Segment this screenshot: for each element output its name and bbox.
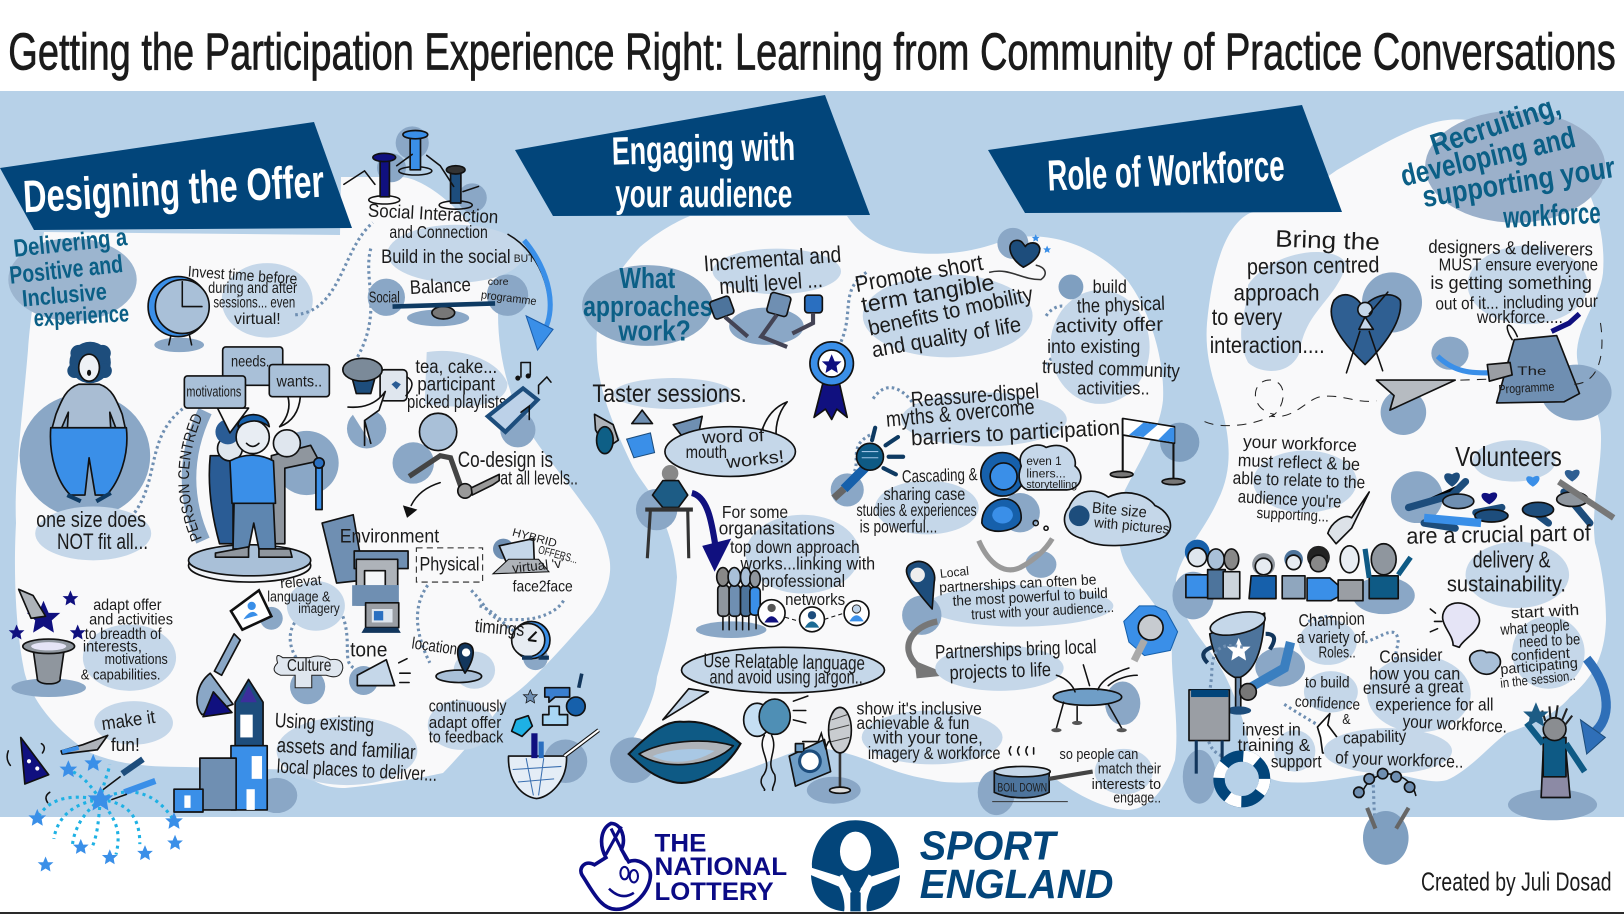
text: for some organisations: works...linking with — [740, 554, 875, 574]
text: are a crucial part: delivery & — [1473, 547, 1550, 573]
arrow: blue curve — [507, 234, 553, 350]
speech bubble: relatable language: and avoid using jargon.. — [709, 667, 863, 689]
icon: balance: programme — [480, 289, 537, 308]
speech bubbles: needs, motivations, wants: motivations — [186, 385, 241, 401]
icon: bowl and feedback puzzle — [508, 673, 599, 799]
text: cascading: is powerful... — [860, 516, 937, 536]
subheading: delivering a positive and inclusive experience — [8, 224, 137, 332]
logo: sport england: ENGLAND — [920, 861, 1113, 907]
icon: word of mouth bubble: works! — [724, 446, 785, 472]
logo: sport england — [811, 820, 1113, 911]
text: consider how — [1363, 645, 1508, 737]
icon: paper plane — [1376, 380, 1455, 435]
speech bubbles: needs, motivations, wants: wants.. — [276, 373, 322, 390]
icon: trophy with hand — [1203, 608, 1305, 715]
text: incremental and multi level — [703, 241, 842, 299]
text: bring the person centred: approach — [1234, 279, 1319, 305]
text: co-design — [458, 447, 578, 490]
text: volunteers: Volunteers — [1455, 441, 1562, 472]
icon: word of mouth bubble: word of — [701, 425, 765, 447]
text: cascading — [857, 464, 979, 536]
heading: engaging with your audience: your audience — [615, 172, 792, 216]
text: hybrid offers: OFFERS... — [537, 544, 579, 566]
text: capability of workforce — [1324, 726, 1464, 774]
icon: handshake — [979, 539, 1056, 578]
heading banner: designing the offer — [0, 122, 352, 230]
text: reassure dispel: myths & overcome — [885, 394, 1036, 432]
text: champion roles — [1297, 608, 1365, 665]
text: so people can match: match their — [1098, 762, 1161, 778]
icon: cupcake, mug and hand — [343, 358, 412, 448]
text: designers and deliverers: workforce.... — [1476, 307, 1563, 327]
text: local partnerships: trust with your audience... — [971, 600, 1114, 623]
text: start with what people: confident — [1510, 646, 1570, 665]
icon: phone and music notes — [488, 362, 551, 447]
text: promote short term: term tangible — [859, 269, 996, 318]
text: cascading: studies & experiences — [857, 500, 977, 520]
text: continuously adapt — [428, 697, 507, 750]
text: continuously adapt: to feedback — [429, 728, 504, 747]
text: hybrid offers: face2face — [513, 578, 573, 595]
text: build the physical: into existing — [1047, 336, 1140, 358]
icon: diverse group of people — [1172, 540, 1415, 619]
heading: engaging with your audience: Engaging with — [611, 125, 796, 174]
text: tea cake playlists: tea, cake... — [415, 356, 497, 378]
text: promote short term: and quality of life — [870, 311, 1023, 362]
text: make it fun: make it — [100, 706, 157, 734]
text: adapt offer: and activities — [89, 612, 173, 629]
text: adapt offer: adapt offer — [93, 597, 162, 614]
subheading: delivering a positive and inclusive experience: Positive and — [8, 251, 124, 290]
text: relevant language and imagery: relevat — [280, 573, 322, 592]
text: tea cake playlists: participant — [417, 373, 496, 395]
subheading: recruiting, developing and supporting your workforce — [1398, 89, 1618, 235]
icon: pointing white hand — [1317, 714, 1337, 753]
icon: fist badge — [1124, 606, 1178, 661]
logo: the national lottery: THE — [655, 830, 706, 857]
icon: lightbulb and hand — [393, 413, 461, 487]
icon: boil down pot — [978, 747, 1093, 815]
icon: buildings — [322, 515, 408, 606]
subheading: what approaches work: work? — [617, 316, 691, 348]
text: consider how: your workforce. — [1402, 711, 1508, 737]
text: invest in training — [1238, 719, 1322, 772]
text: so people can match: so people can — [1060, 747, 1138, 763]
text: for some organisations: professional — [761, 571, 845, 591]
text: partnerships bring local: Partnerships bring local — [935, 636, 1097, 664]
icon: the programme bag: The — [1517, 364, 1546, 378]
cloud: even one liners: even 1 — [1026, 454, 1062, 468]
text: social interaction and connection: Social Interaction — [367, 199, 499, 227]
subheading: what approaches work: What — [619, 263, 676, 295]
text: build the physical — [1042, 274, 1180, 404]
dashed flight path — [1205, 321, 1602, 426]
panel: right white area — [1176, 119, 1606, 783]
text: relevant language and imagery — [267, 573, 345, 631]
text: hybrid offers: virtual 'v' — [511, 555, 564, 576]
text: your workforce must reflect: must reflect & be — [1238, 450, 1360, 474]
text: for some organisations: For some — [722, 502, 788, 522]
text: designers and deliverers: MUST ensure everyone — [1439, 254, 1598, 274]
text: co-design: at all levels.. — [500, 468, 578, 490]
cloud: even one liners: liners... — [1026, 466, 1066, 480]
arrow: small down — [403, 483, 440, 518]
text: start with what people — [1499, 602, 1585, 691]
text: promote short term: benefits to mobility — [866, 281, 1035, 340]
subheading: recruiting, developing and supporting your workforce: Recruiting, — [1426, 89, 1565, 162]
subheading: delivering a positive and inclusive experience: Inclusive — [21, 278, 108, 313]
icon: location pin — [411, 634, 495, 689]
text: build the physical: trusted community — [1042, 356, 1180, 383]
text: designers and deliverers: out of it... including your — [1435, 291, 1598, 314]
icon: person on table — [636, 465, 693, 558]
text: promote short term: Promote short — [853, 249, 985, 297]
icon: flip chart — [1183, 690, 1229, 804]
text: using existing assets: Using existing — [274, 709, 375, 737]
icon: person reaching for star — [1508, 702, 1597, 820]
text: show its inclusive: show it's inclusive — [857, 699, 982, 719]
icon: skittle pins — [344, 126, 487, 212]
icon: word of mouth bubble: mouth — [686, 442, 727, 462]
icon: lips — [610, 722, 741, 783]
icon: heart with person — [1331, 272, 1422, 373]
text: environment and physical: Environment — [340, 526, 440, 548]
panel: left white area — [15, 177, 610, 788]
icon: magic hat and stars — [9, 589, 86, 697]
dotted connectors — [135, 223, 373, 513]
text: to build confidence: confidence — [1294, 693, 1360, 714]
text: tea cake playlists: picked playlists — [407, 391, 506, 412]
icon: video laptop — [352, 585, 401, 633]
text: partnerships bring local — [935, 636, 1097, 691]
dotted connectors — [841, 271, 1069, 471]
text: designers and deliverers: is getting something — [1430, 272, 1592, 293]
text: invest in training: invest in — [1242, 719, 1301, 739]
icon: megaphone: tone — [350, 639, 387, 662]
icon: woman with oversized trousers — [20, 342, 150, 518]
text: so people can match — [1060, 747, 1161, 807]
icon: megaphone — [349, 639, 410, 695]
text: build the physical: the physical — [1077, 293, 1165, 318]
text: cascading: Cascading & — [902, 464, 978, 487]
icon: heart in hand — [989, 228, 1051, 280]
icon: woman in headscarf — [981, 453, 1040, 532]
text: using existing assets: assets and familiar — [276, 734, 416, 764]
text: adapt offer: & capabilities. — [81, 667, 161, 683]
text: continuously adapt: adapt offer — [429, 713, 502, 732]
icon: culture puzzle cloud: Culture — [287, 655, 331, 675]
icon: lifebuoy — [1219, 756, 1265, 802]
text: invest time: during and after — [208, 280, 297, 297]
text: bring the person centred: person centred — [1247, 251, 1380, 279]
text: adapt offer — [81, 597, 176, 691]
text: are a crucial part — [1406, 520, 1592, 608]
text: invest time: Invest time before — [187, 264, 298, 288]
text: capability of workforce: of your workforce.. — [1335, 747, 1464, 772]
text: show its inclusive: with your tone, — [872, 728, 983, 748]
icon: volunteer hands and hearts — [1391, 470, 1614, 528]
text: consider how: experience for all — [1375, 694, 1493, 714]
text: consider how: how you can — [1369, 663, 1460, 683]
icon: balloons — [744, 696, 808, 790]
text: hybrid offers: HYBRID — [511, 527, 558, 550]
text: champion roles: Champion — [1298, 608, 1365, 631]
text: one size does not fit all: one size does — [36, 507, 146, 532]
icon: barrier — [1110, 418, 1199, 485]
text: champion roles: Roles.. — [1318, 645, 1356, 662]
heading banner: role of workforce — [988, 105, 1342, 213]
text: build the physical: activities.. — [1077, 378, 1150, 399]
background band — [0, 91, 1624, 817]
icon: balance: core — [488, 277, 509, 288]
text: cascading: sharing case — [883, 484, 965, 504]
text: capability of workforce: capability — [1343, 726, 1407, 748]
text: to build confidence: to build — [1305, 675, 1350, 692]
text: social interaction and connection — [367, 199, 534, 283]
text: consider how: ensure a great — [1363, 676, 1464, 698]
subheading: delivering a positive and inclusive experience: Delivering a — [12, 224, 129, 263]
text: for some organisations — [719, 502, 875, 609]
icon: picture frame — [231, 590, 283, 630]
icon: the programme bag: Programme — [1498, 380, 1555, 397]
text: social interaction and connection: BUT — [514, 253, 534, 265]
text: so people can match: engage.. — [1113, 791, 1161, 807]
text: continuously adapt: continuously — [429, 697, 507, 716]
icon: culture puzzle cloud — [274, 655, 343, 704]
subheading: what approaches work — [582, 263, 713, 348]
icon: lightbulb and cloud — [1430, 603, 1500, 674]
text: relevant language and imagery: language & — [267, 590, 331, 606]
panel: middle white area — [597, 216, 1176, 810]
icon: standing people — [696, 568, 766, 638]
logo: the national lottery: NATIONAL — [655, 854, 787, 881]
icon: microphone — [803, 707, 861, 804]
icon: person centred group — [178, 408, 339, 583]
text: bring the person centred: interaction.... — [1210, 332, 1325, 358]
text: reassure dispel: Reassure-dispel — [910, 378, 1040, 412]
heading: role of workforce: Role of Workforce — [1046, 142, 1286, 201]
icon: spanner hand — [197, 634, 240, 717]
text: adapt offer: interests, — [83, 638, 142, 655]
icon: balance: Social — [369, 289, 400, 306]
text: build the physical: activity offer — [1055, 314, 1164, 337]
cloud: bite size with pictures: Bite size — [1091, 500, 1147, 521]
text: incremental and multi level: multi level ... — [718, 266, 823, 299]
text: show its inclusive: imagery & workforce — [868, 743, 1000, 763]
text: partnerships bring local: projects to life — [949, 659, 1051, 684]
dotted connectors — [290, 585, 564, 668]
icon: rosette — [810, 342, 853, 419]
text: start with what people: in the session.. — [1499, 668, 1576, 691]
heading: engaging with your audience — [611, 125, 796, 216]
icon: balance — [368, 274, 537, 326]
text: show its inclusive: achievable & fun — [857, 713, 969, 733]
heading banner: engaging with your audience — [515, 95, 870, 216]
text: using existing assets — [274, 709, 438, 786]
text: local partnerships: partnerships can often be — [939, 572, 1097, 596]
cloud: bite size with pictures: with pictures — [1092, 515, 1170, 538]
icon: pin and curved arrow — [902, 561, 948, 678]
text: local partnerships: the most powerful to build — [952, 586, 1108, 610]
text: environment and physical — [340, 526, 483, 582]
text: relevant language and imagery: imagery — [298, 601, 340, 616]
speech bubble: relatable language — [663, 647, 884, 720]
text: are a crucial part: sustainability. — [1447, 571, 1566, 596]
subheading: recruiting, developing and supporting your workforce: developing and — [1398, 121, 1579, 193]
arrow: right curve — [1580, 659, 1606, 754]
icon: hands holding social tiles — [709, 292, 822, 347]
icon: raised fist — [831, 428, 903, 506]
text: reassure dispel: barriers to participation — [910, 414, 1121, 450]
icon: pointing hand — [61, 735, 108, 754]
icon: shapes and hand — [594, 410, 655, 458]
footer rule — [0, 912, 1624, 914]
icon: laptop — [493, 539, 549, 574]
speech bubbles: needs, motivations, wants: needs... — [231, 354, 277, 371]
text: incremental and multi level: Incremental and — [703, 241, 842, 276]
icon: fireworks — [28, 754, 183, 872]
icon: timings clock — [474, 615, 550, 670]
text: your workforce must reflect: able to relate to the — [1232, 468, 1366, 492]
speech bubble: relatable language: Use Relatable language — [703, 650, 865, 675]
text: invest time — [187, 263, 313, 338]
text: so people can match: interests to — [1092, 777, 1161, 793]
text: volunteers — [1455, 440, 1562, 482]
cloud: even one liners — [1019, 445, 1081, 491]
text: reassure dispel — [885, 378, 1121, 450]
icon: party hat — [7, 737, 50, 803]
icon: trampoline — [1051, 665, 1140, 732]
text: taster sessions: Taster sessions. — [592, 381, 747, 408]
heading: designing the offer: Designing the Offer — [22, 156, 326, 222]
text: adapt offer: motivations — [105, 652, 168, 668]
text: are a crucial part: are a crucial part of — [1406, 520, 1592, 549]
text: make it fun: fun! — [111, 734, 140, 755]
icon: timings clock: timings — [474, 615, 525, 640]
text: to build confidence: & — [1342, 712, 1351, 728]
logo: sport england: SPORT — [920, 823, 1059, 869]
cloud: even one liners: storytelling — [1026, 479, 1077, 491]
text: person centred arc: PERSON CENTRED — [178, 414, 202, 542]
text: show its inclusive — [857, 699, 1003, 764]
icon: open hand — [1328, 492, 1369, 544]
text: hybrid offers — [511, 527, 579, 595]
text: for some organisations: organasitations — [719, 517, 835, 538]
text: invest in training: training & — [1238, 735, 1310, 755]
text: one size does not fit all — [35, 506, 151, 560]
text: your workforce must reflect: supporting... — [1256, 505, 1329, 526]
text: consider how: Consider — [1379, 645, 1443, 667]
icon: clock — [148, 277, 209, 352]
text: designers and deliverers: designers & deliverers — [1428, 236, 1593, 260]
text: using existing assets: local places to deliver... — [276, 756, 438, 786]
text: one size does not fit all: NOT fit all... — [57, 529, 148, 554]
icon: boil down pot: BOIL DOWN — [997, 780, 1047, 794]
text: invest time: sessions... even — [213, 295, 295, 312]
text: invest in training: support — [1271, 751, 1322, 771]
arrow: navy down — [692, 493, 731, 572]
text: bring the person centred: Bring the — [1275, 226, 1380, 256]
text: bring the person centred: to every — [1212, 304, 1283, 330]
icon: word of mouth bubble — [665, 402, 795, 476]
text: tea cake playlists — [407, 351, 507, 412]
text: your workforce must reflect: audience you're — [1237, 486, 1342, 512]
text: champion roles: a variety of — [1297, 628, 1365, 647]
text: start with what people: start with — [1510, 602, 1580, 622]
text: local partnerships — [927, 564, 1114, 627]
text: invest time: virtual! — [234, 311, 281, 328]
logo: the national lottery: LOTTERY — [655, 879, 774, 906]
text: start with what people: need to be — [1519, 631, 1581, 651]
icon: network circles — [758, 600, 869, 632]
text: social interaction and connection: and Connection — [389, 222, 488, 242]
logo: the national lottery — [581, 823, 787, 909]
icon: the programme bag — [1431, 314, 1612, 420]
text: your workforce must reflect: your workforce — [1243, 431, 1357, 455]
text: social interaction and connection: Build in the social — [381, 246, 511, 268]
text: your workforce must reflect — [1232, 431, 1366, 526]
icon: camera — [789, 739, 831, 786]
icon: key — [458, 474, 499, 498]
icon: juggling skills hands — [1354, 768, 1416, 865]
text: for some organisations: top down approach — [730, 537, 860, 557]
text: co-design: Co-design is — [458, 447, 553, 472]
text: build the physical: build — [1093, 276, 1127, 297]
text: to build confidence — [1294, 671, 1360, 728]
text: make it fun — [94, 701, 173, 755]
text: bring the person centred — [1210, 226, 1380, 371]
dotted connectors — [1206, 616, 1400, 858]
cloud: bite size with pictures — [1033, 491, 1170, 546]
text: start with what people: participating — [1500, 656, 1578, 678]
text: start with what people: what people — [1499, 617, 1570, 639]
icon: location pin: location — [411, 634, 458, 659]
text: environment and physical: Physical — [419, 554, 480, 576]
text: adapt offer: to breadth of — [85, 626, 162, 643]
text: for some organisations: networks — [785, 590, 845, 609]
text: designers and deliverers — [1428, 236, 1598, 327]
icon: town buildings — [174, 679, 297, 813]
subheading: what approaches work: approaches — [583, 291, 713, 323]
text: promote short term — [853, 249, 1035, 362]
icon: balance: Balance — [409, 274, 471, 299]
text: local partnerships: Local — [939, 564, 970, 581]
subheading: delivering a positive and inclusive experience: experience — [33, 300, 130, 332]
speech bubbles: needs, motivations, wants — [184, 347, 329, 433]
